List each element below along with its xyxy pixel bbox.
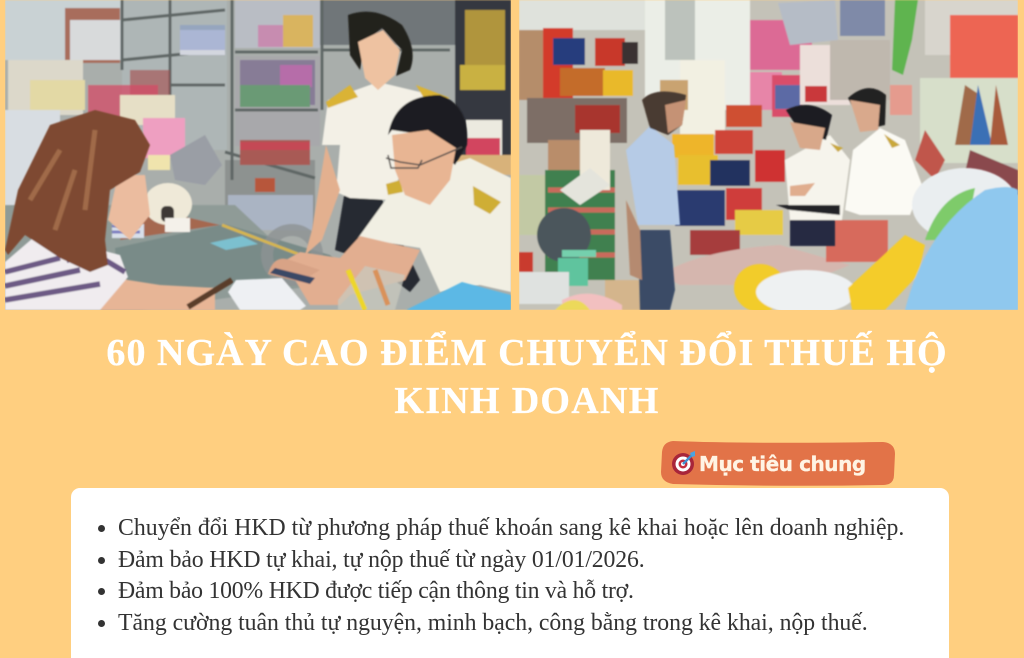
white goals card [71,488,949,658]
owner [638,230,675,310]
goals list [98,515,904,636]
phone in hand [188,280,232,307]
title: 60 NGÀY CAO ĐIỂM CHUYỂN ĐỔI THUẾ HỘ [106,332,948,374]
goals list: Đảm bảo HKD tự khai, tự nộp thuế từ ngày 01/01/2026. [118,547,645,573]
goals list: Đảm bảo 100% HKD được tiếp cận thông tin và hỗ trợ. [118,578,634,604]
seated woman [12,270,215,310]
merchandise wall [750,20,812,70]
title [106,330,948,422]
photo: tax officers at general goods shop [519,0,1018,310]
seated officer [358,158,511,292]
pen holder [338,266,405,310]
title: KINH DOANH [394,380,660,422]
goals list: Tăng cường tuân thủ tự nguyện, minh bạch, công bằng trong kê khai, nộp thuế. [118,610,868,636]
standing officer [335,190,420,292]
officer standing [845,128,922,215]
heading pill: Mục tiêu chung [661,441,895,486]
notebook [228,278,306,310]
pill label: Mục tiêu chung [699,452,866,476]
goals list: Chuyển đổi HKD từ phương pháp thuế khoán sang kê khai hoặc lên doanh nghiệp. [118,515,904,541]
photo: tax officers with shop owner at stationery store [5,0,511,310]
officer writing [790,215,835,246]
boxes of goods [672,134,714,158]
blue folder [406,282,511,310]
plastic goods [734,264,786,312]
icon: target [672,451,695,475]
